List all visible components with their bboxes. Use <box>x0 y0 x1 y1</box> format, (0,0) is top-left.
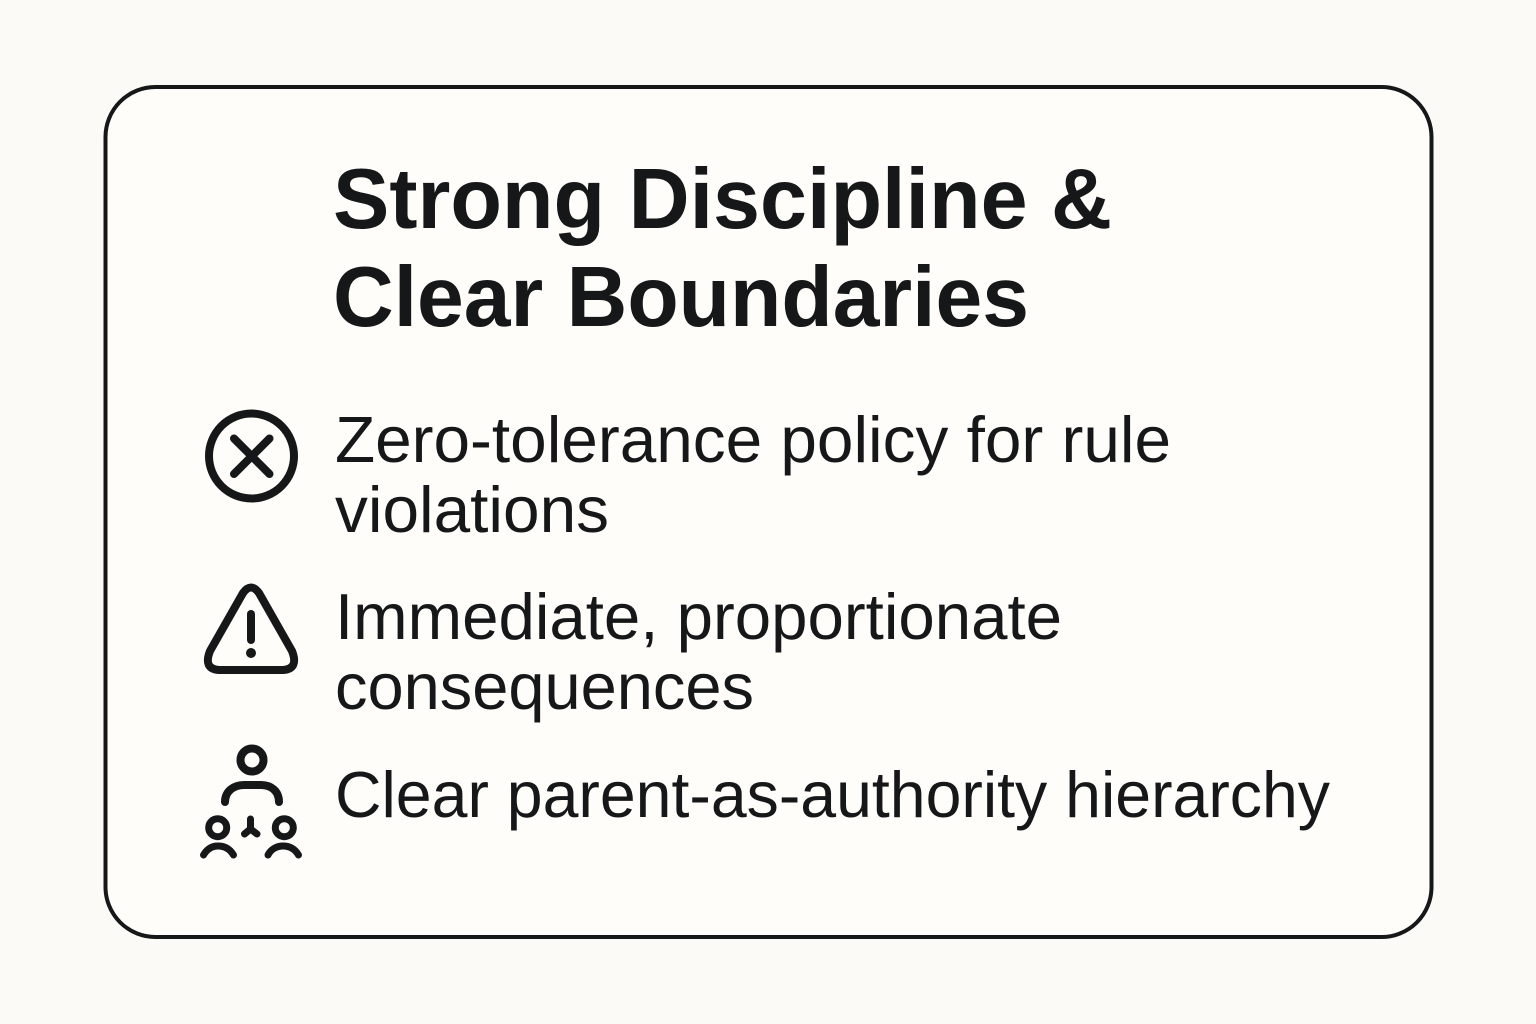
icon: x in circle <box>209 414 294 498</box>
heading: Clear Boundaries <box>333 250 1029 345</box>
text: immediate consequences: consequences <box>335 650 754 723</box>
heading <box>333 152 1112 345</box>
heading: Strong Discipline & <box>333 152 1112 247</box>
text: zero-tolerance policy: Zero-tolerance policy for rule <box>335 403 1171 476</box>
icon: hierarchy of people <box>204 748 298 855</box>
text: parent hierarchy: Clear parent-as-authority hierarchy <box>335 758 1330 831</box>
icon: warning triangle <box>208 588 294 670</box>
panel: card <box>106 87 1432 937</box>
text: immediate consequences: Immediate, proportionate <box>335 580 1062 653</box>
text: immediate consequences <box>335 580 1062 723</box>
text: zero-tolerance policy: violations <box>335 473 609 546</box>
text: zero-tolerance policy <box>335 403 1171 546</box>
